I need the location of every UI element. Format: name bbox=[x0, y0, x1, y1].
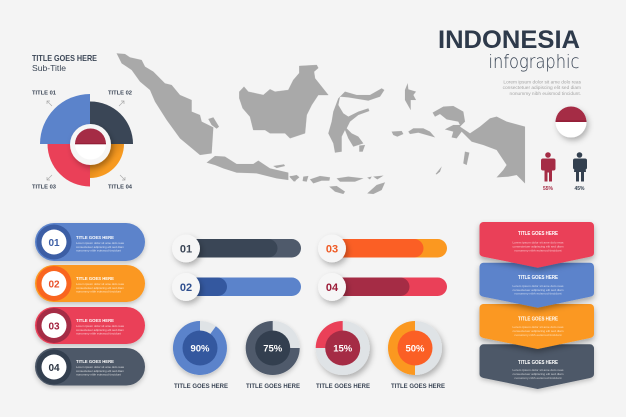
pill 03 bbox=[35, 307, 145, 344]
heading: chart title: TITLE GOES HERE bbox=[32, 54, 97, 63]
bar 03: 03 bbox=[326, 244, 338, 256]
banner 02: consectetuer adipiscing elit sed diam bbox=[512, 288, 564, 292]
donut 90%: TITLE GOES HERE bbox=[174, 384, 228, 390]
pill 01: consectetuer adipiscing elit sed diam bbox=[76, 245, 124, 249]
donut 75%: 75% bbox=[263, 344, 283, 354]
icon: male figure 55%: 55% bbox=[543, 186, 554, 192]
pill 02: consectetuer adipiscing elit sed diam bbox=[76, 286, 124, 290]
donut 15%: TITLE GOES HERE bbox=[316, 384, 370, 390]
pill 01: TITLE GOES HERE bbox=[76, 235, 115, 241]
bar 02: 02 bbox=[180, 282, 192, 294]
banner 03 bbox=[480, 304, 594, 349]
pill 01 bbox=[35, 223, 145, 261]
pill 03: Lorem ipsum dolor sit ame dolo reas bbox=[76, 324, 124, 328]
banner 03: TITLE GOES HERE bbox=[518, 316, 558, 322]
donut 15% bbox=[316, 321, 370, 390]
banner 01: TITLE GOES HERE bbox=[518, 231, 558, 237]
bar 04: 04 bbox=[326, 282, 339, 294]
heading: chart title: Sub-Title bbox=[32, 64, 66, 73]
donut 75%: TITLE GOES HERE bbox=[246, 384, 300, 390]
map of Indonesia bbox=[117, 53, 525, 194]
pill 03: TITLE GOES HERE bbox=[76, 318, 115, 324]
panel: progress bars bbox=[172, 234, 447, 301]
pill 03: 03 bbox=[48, 321, 60, 332]
bar 03 bbox=[318, 234, 447, 262]
panel: numbered pills bbox=[35, 223, 145, 386]
donut 50% bbox=[388, 321, 445, 390]
pill 02: 02 bbox=[48, 279, 60, 290]
banner 01 bbox=[480, 222, 594, 268]
pill 03: consectetuer adipiscing elit sed diam bbox=[76, 328, 124, 332]
banner 04: consectetuer adipiscing elit sed diam bbox=[512, 372, 564, 376]
bar 01: 01 bbox=[180, 244, 192, 256]
banner 02: Lorem ipsum dolor sit ame dolo reas bbox=[512, 284, 564, 288]
intro text: Lorem ipsum dolor sit ame dolo reas bbox=[503, 80, 582, 86]
pill 04: Lorem ipsum dolor sit ame dolo reas bbox=[76, 365, 124, 369]
icon: male figure 55% bbox=[541, 152, 556, 192]
bar 02 bbox=[172, 273, 301, 301]
icon: female figure 45% bbox=[573, 152, 587, 192]
pill 03: nonummy nibh euismod tincidunt bbox=[76, 332, 121, 336]
banner 04: TITLE GOES HERE bbox=[518, 360, 558, 366]
icon: female figure 45%: 45% bbox=[574, 186, 585, 192]
chart: quadrant pie with flag bbox=[40, 94, 133, 186]
donut 50%: TITLE GOES HERE bbox=[391, 384, 445, 390]
intro text: consectetuer adipiscing elit sed diam bbox=[503, 85, 581, 91]
donut 90% bbox=[173, 321, 228, 390]
banner 01: Lorem ipsum dolor sit ame dolo reas bbox=[512, 240, 564, 244]
donut 50%: 50% bbox=[405, 344, 425, 354]
icon: flag circle bbox=[556, 106, 586, 138]
pill 02 bbox=[35, 265, 145, 302]
banner 04 bbox=[480, 344, 594, 389]
pie labels and arrows: TITLE 03 bbox=[32, 184, 56, 190]
banner 01: nonummy nibh euismod tincidunt bbox=[514, 248, 562, 252]
intro text bbox=[503, 80, 582, 97]
pill 04 bbox=[35, 348, 145, 386]
pill 02: nonummy nibh euismod tincidunt bbox=[76, 290, 121, 294]
bar 04 bbox=[318, 273, 447, 301]
pill 04: nonummy nibh euismod tincidunt bbox=[76, 372, 121, 376]
bar 01 bbox=[172, 234, 301, 262]
intro text: nonummy nibh euismod tincidunt. bbox=[510, 91, 581, 97]
banner 04: nonummy nibh euismod tincidunt bbox=[514, 376, 562, 380]
panel: stacked arrow banners bbox=[480, 222, 594, 389]
banner 02: nonummy nibh euismod tincidunt bbox=[514, 292, 562, 296]
banner 03: nonummy nibh euismod tincidunt bbox=[514, 333, 562, 337]
banner 02: TITLE GOES HERE bbox=[518, 275, 558, 281]
banner 04: Lorem ipsum dolor sit ame dolo reas bbox=[512, 368, 564, 372]
pill 04: TITLE GOES HERE bbox=[76, 359, 115, 365]
pill 04: consectetuer adipiscing elit sed diam bbox=[76, 369, 124, 373]
pill 02: Lorem ipsum dolor sit ame dolo reas bbox=[76, 282, 124, 286]
banner 01: consectetuer adipiscing elit sed diam bbox=[512, 244, 564, 248]
pill 02: TITLE GOES HERE bbox=[76, 276, 115, 282]
heading: chart title bbox=[32, 54, 97, 73]
title bbox=[438, 26, 580, 73]
panel: donut gauges bbox=[173, 321, 445, 390]
pie labels and arrows bbox=[32, 90, 132, 190]
banner 02 bbox=[480, 263, 594, 308]
banner 03: Lorem ipsum dolor sit ame dolo reas bbox=[512, 325, 564, 329]
title: INDONESIA bbox=[438, 26, 580, 54]
title: infographic bbox=[488, 51, 580, 73]
donut 15%: 15% bbox=[333, 344, 353, 354]
pie labels and arrows: TITLE 01 bbox=[32, 90, 56, 96]
pie labels and arrows: TITLE 04 bbox=[108, 184, 132, 190]
pill 01: 01 bbox=[48, 238, 60, 249]
pie labels and arrows: TITLE 02 bbox=[108, 90, 132, 96]
pill 01: Lorem ipsum dolor sit ame dolo reas bbox=[76, 241, 124, 245]
donut 90%: 90% bbox=[190, 344, 210, 354]
banner 03: consectetuer adipiscing elit sed diam bbox=[512, 329, 564, 333]
donut 75% bbox=[246, 321, 300, 390]
pill 01: nonummy nibh euismod tincidunt bbox=[76, 248, 121, 252]
pill 04: 04 bbox=[48, 363, 60, 374]
